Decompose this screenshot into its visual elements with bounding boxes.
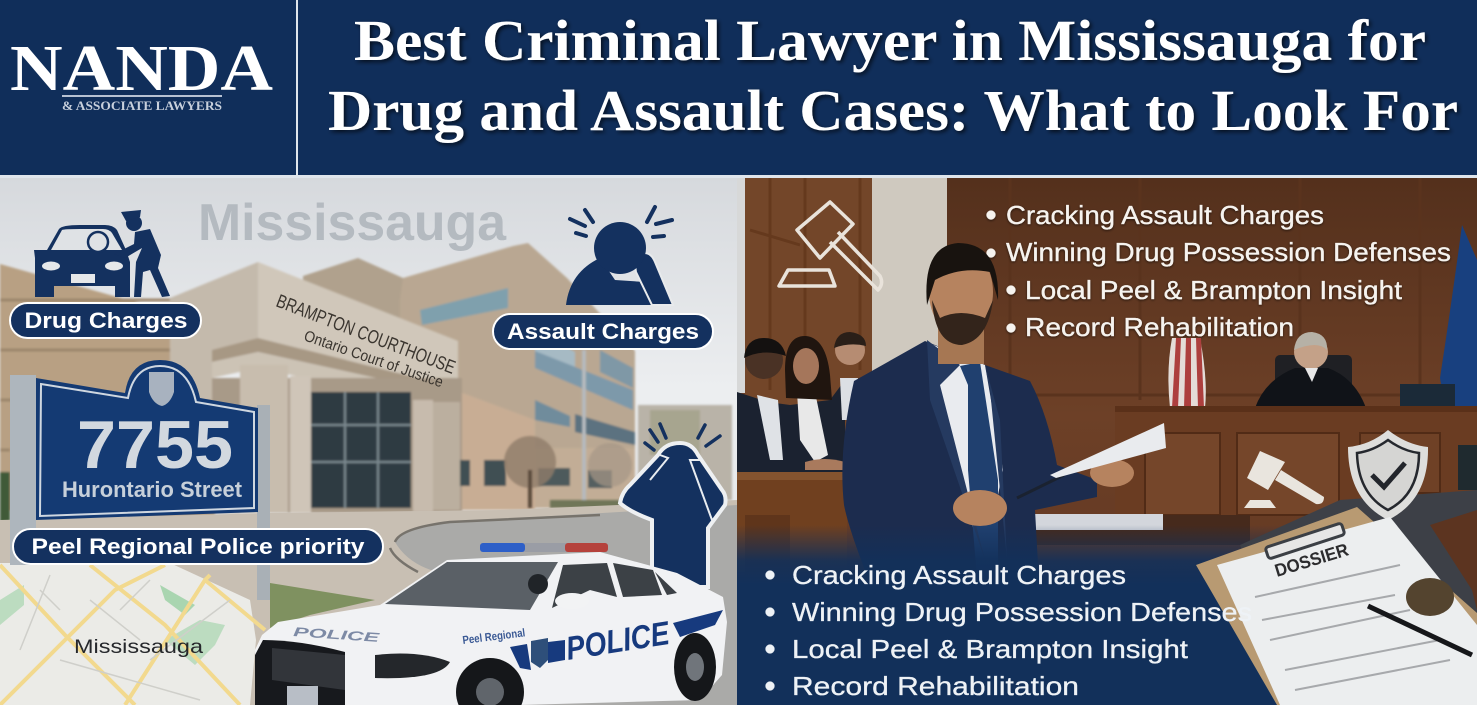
icon: distressed person [566,207,673,305]
label: Assault Charges: Assault Charges [507,319,699,344]
sign street: Hurontario Street [62,477,243,502]
flags [1168,225,1477,408]
car lettering: POLICE [563,614,673,667]
upper bullet list: Cracking Assault Charges [1006,200,1324,230]
map label: Mississauga [74,636,203,658]
icon: gavel outline [779,202,882,290]
icon: officer checking car [34,210,170,297]
sign crest [149,372,174,406]
upper bullet list: Winning Drug Possession Defenses [1006,237,1451,267]
title: Drug and Assault Cases: What to Look For [328,78,1458,143]
ground and road [0,500,737,705]
icon: small gavel [1244,451,1324,508]
panel: courtroom scene [737,178,1477,705]
address sign [10,360,270,600]
document in hand [1050,423,1166,478]
title [328,8,1458,143]
map inset [0,563,265,705]
tree and lamp post [504,350,670,510]
courthouse building [0,243,732,522]
courthouse lettering: Ontario Court of Justice [302,328,445,391]
label: Drug Charges [10,303,201,338]
courtroom table [1024,514,1250,545]
judge and bench [1115,332,1477,516]
lower blue area [737,585,1297,705]
dossier clipboard: DOSSIER [1272,539,1351,581]
label: Peel Regional Police priority: Peel Regional Police priority [32,534,365,559]
label: Peel Regional Police priority [13,529,383,564]
book [1430,510,1477,610]
logo: & ASSOCIATE LAWYERS [62,99,222,113]
icon: distressed person holding head [620,424,726,587]
lower bullet list: Cracking Assault Charges [792,560,1126,590]
police car: Peel Regional [462,627,526,647]
lower bullet list [766,560,1252,701]
lower bullet list: Local Peel & Brampton Insight [792,634,1189,664]
icon: shield with check [1348,430,1428,520]
upper bullet list: Local Peel & Brampton Insight [1025,275,1403,305]
jury [737,332,866,575]
sign number: 7755 [77,407,233,483]
lower bullet list: Winning Drug Possession Defenses [792,597,1252,627]
lower bullet list: Record Rehabilitation [792,671,1079,701]
title: Best Criminal Lawyer in Mississauga for [354,8,1426,73]
lower blue fade [737,525,1297,585]
label: Drug Charges: Drug Charges [24,308,188,333]
upper bullet list [986,200,1451,342]
faded Mississauga heading: Mississauga [198,194,507,252]
label: Assault Charges [493,314,713,349]
panel: Mississauga courthouse scene [0,178,737,705]
upper bullet list: Record Rehabilitation [1025,312,1294,342]
logo: NANDA [10,32,273,105]
police car [255,543,727,705]
dossier clipboard [1196,507,1477,705]
police car: POLICE [293,624,380,645]
header banner [0,0,1477,178]
dark table right [1240,490,1477,705]
courthouse lettering: BRAMPTON COURTHOUSE [273,291,458,379]
lawyer figure [842,243,1166,600]
